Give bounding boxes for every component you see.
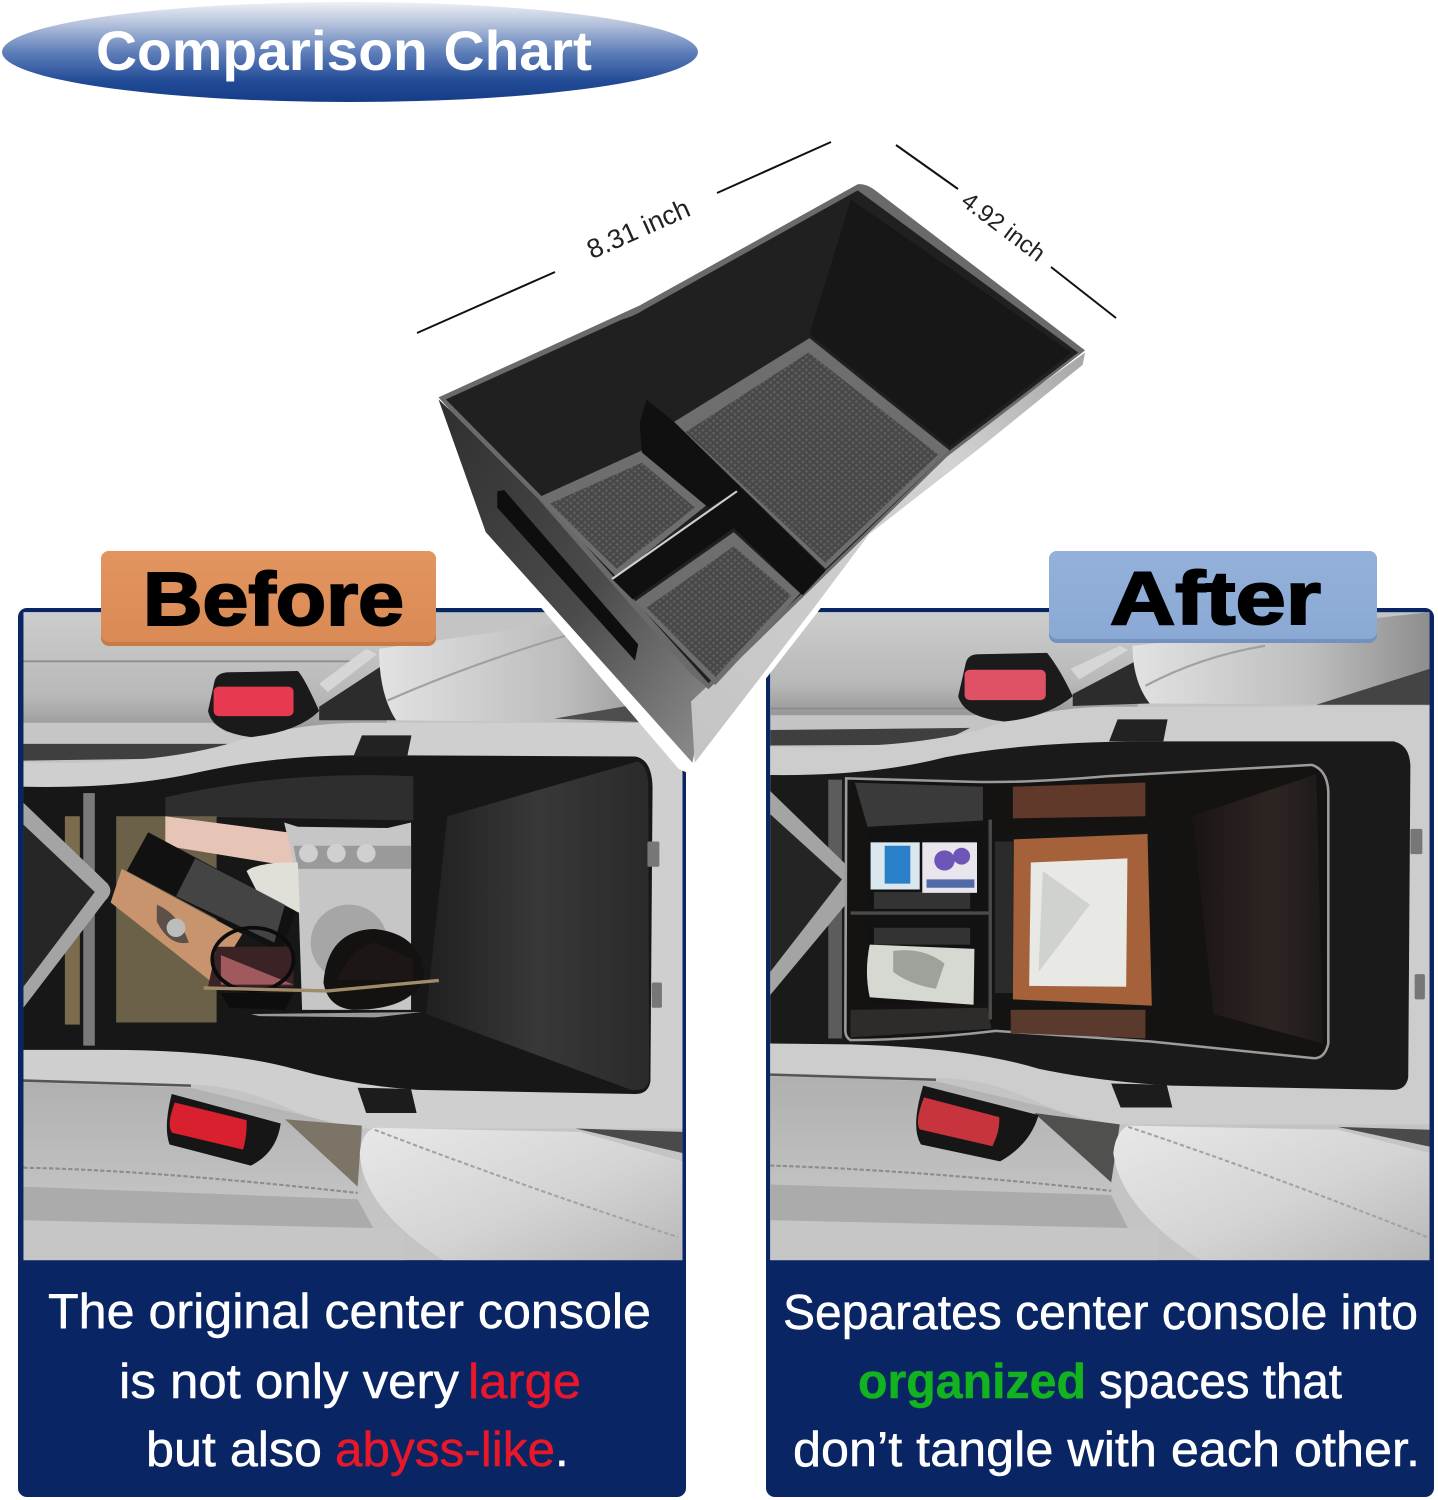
- caption: before: abyss-like: [335, 1423, 555, 1477]
- label: before: Before: [143, 557, 404, 641]
- photo: organized console: [770, 612, 1430, 1260]
- outer right wall: [691, 352, 1085, 763]
- label: after: [1049, 551, 1377, 643]
- lower buckle: [167, 1094, 281, 1166]
- label: after: After: [1110, 556, 1321, 640]
- panel: before: [18, 608, 686, 1497]
- caption: before: large: [468, 1355, 581, 1409]
- caption: after: organized: [858, 1355, 1086, 1409]
- title banner: [2, 2, 698, 102]
- spray bottle and book: [126, 832, 296, 919]
- lower buckle: [916, 1086, 1039, 1161]
- panel: after: [766, 608, 1434, 1497]
- photo: cluttered original console: [23, 612, 682, 1260]
- console rim: [770, 706, 1430, 1124]
- snack bag: [284, 823, 411, 1010]
- sunglasses: [212, 928, 294, 991]
- top buckle: [958, 653, 1073, 722]
- caption: before: but also: [146, 1423, 322, 1477]
- label: before: [101, 551, 436, 646]
- console rim: [23, 723, 682, 1129]
- dividers: [640, 399, 737, 508]
- console opening: [23, 755, 653, 1094]
- lower seats: [24, 1082, 362, 1156]
- shifter surround: [23, 803, 110, 1008]
- caption: before: [48, 1285, 651, 1477]
- small mat left: [539, 450, 706, 577]
- top buckle: [208, 671, 319, 737]
- caption: after: spaces that: [1099, 1355, 1342, 1409]
- dimension: length: [417, 142, 831, 333]
- rim and interior: [438, 184, 1085, 689]
- lower seats: [770, 1076, 1084, 1220]
- caption: after: [783, 1286, 1420, 1477]
- small mat right: [635, 532, 800, 685]
- hinge clips: [353, 735, 411, 756]
- rolled banknotes: [867, 945, 974, 1005]
- dimension: length: 8.31 inch: [582, 193, 695, 265]
- handle slot: [497, 490, 638, 661]
- caption: before: is not only very: [119, 1355, 460, 1409]
- dimension: width: [896, 145, 1116, 318]
- snack boxes: [871, 842, 920, 889]
- dimension: width: 4.92 inch: [956, 187, 1050, 267]
- hinge clips: [1109, 719, 1168, 741]
- title banner: Comparison Chart: [96, 19, 592, 82]
- caption: before: .: [555, 1423, 569, 1477]
- outer left wall: [438, 399, 708, 763]
- white halo: [438, 184, 1085, 771]
- large mat: [674, 338, 950, 569]
- divider: [989, 820, 992, 1020]
- caption: after: don’t tangle with each other.: [793, 1423, 1420, 1477]
- tray mats: [868, 828, 983, 910]
- wallet: [1013, 834, 1152, 1006]
- caption: before: The original center console: [48, 1285, 651, 1339]
- organizer tray: [845, 765, 1328, 1058]
- product: organizer tray: [438, 184, 1085, 771]
- console opening: [770, 741, 1410, 1090]
- caption: after: Separates center console into: [783, 1286, 1418, 1340]
